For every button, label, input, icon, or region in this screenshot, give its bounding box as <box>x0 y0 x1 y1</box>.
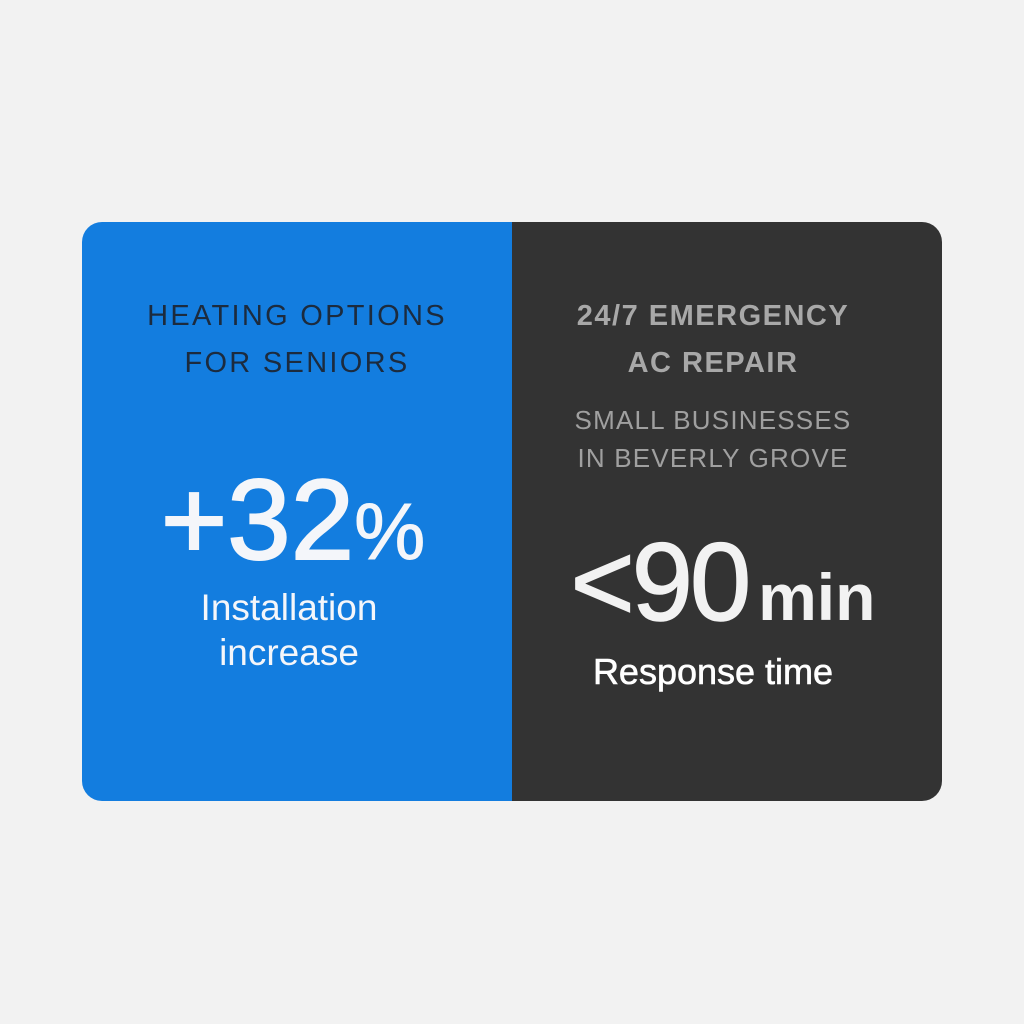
panel: emergency ac <box>512 222 942 801</box>
label line 2: increase <box>219 632 359 673</box>
card <box>82 222 942 801</box>
stat: <90 min: <90min <box>571 521 875 644</box>
heading line 2: AC REPAIR <box>628 347 798 379</box>
subheading: small businesses: SMALL BUSINESSES <box>575 405 851 435</box>
heading line 2: FOR SENIORS <box>184 347 410 379</box>
label: response time: Response time <box>593 651 833 692</box>
heading: 24/7 emergency: 24/7 EMERGENCY <box>577 300 849 332</box>
panel: heating <box>82 222 512 801</box>
heading: heating options: HEATING OPTIONS <box>147 300 447 332</box>
stat: +32%: +32% <box>161 457 425 584</box>
subheading line 2: IN BEVERLY GROVE <box>577 443 849 473</box>
label: installation increase: Installation <box>201 587 377 628</box>
